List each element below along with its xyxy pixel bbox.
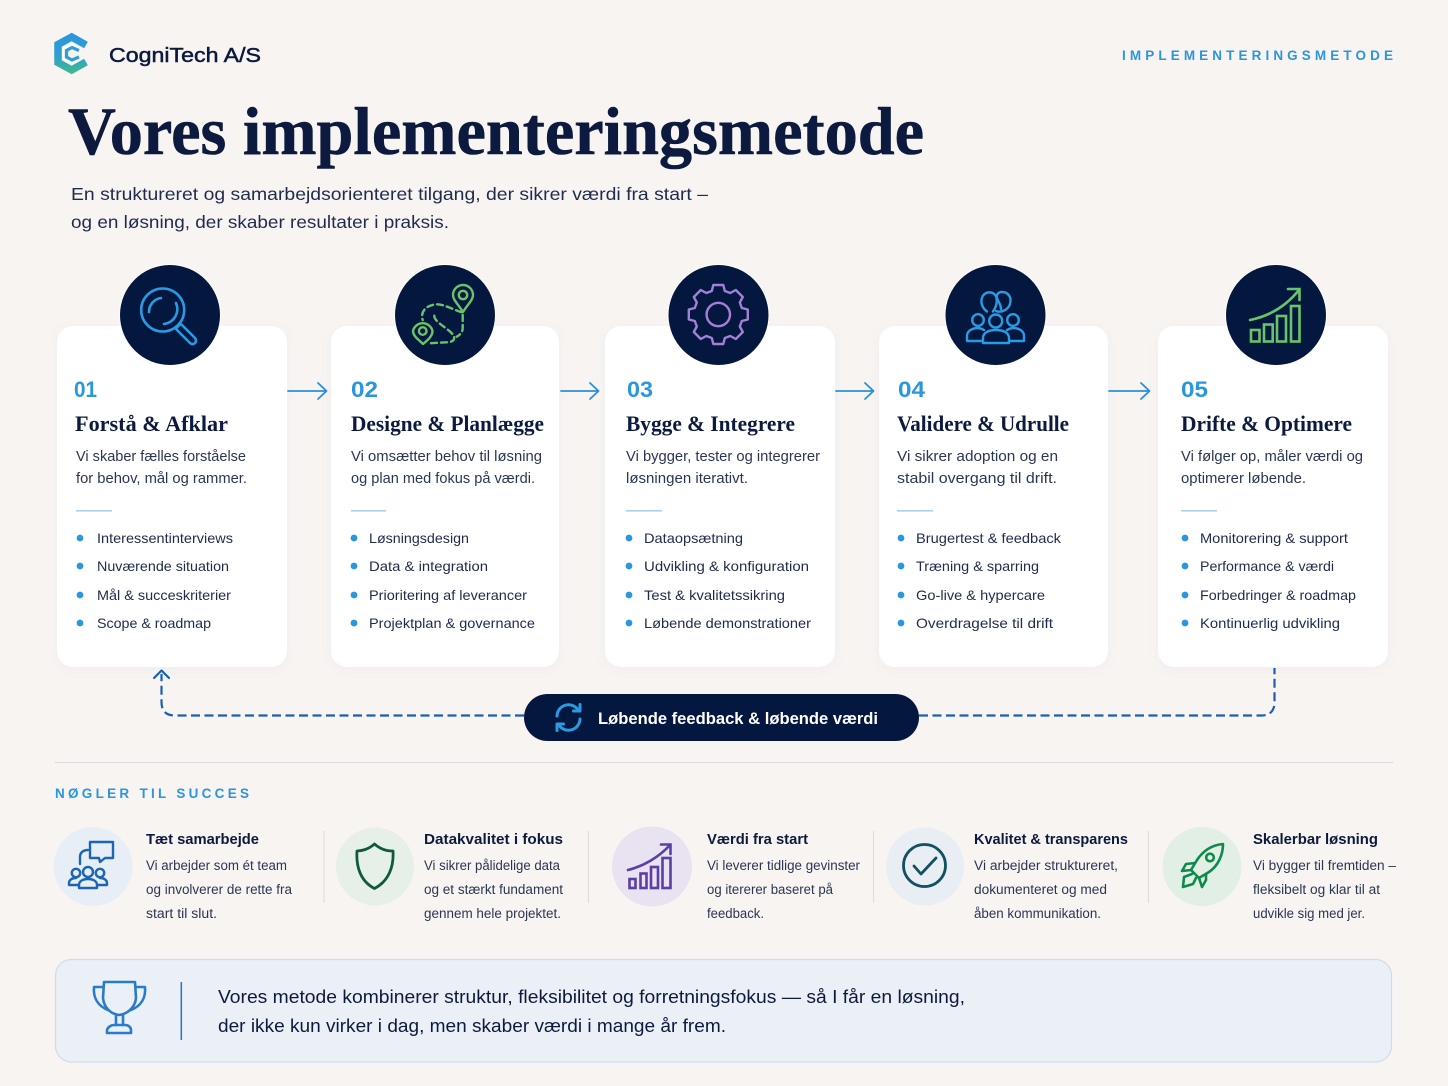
step list: Udvikling & konfiguration bbox=[644, 558, 809, 574]
key text: fleksibelt og klar til at bbox=[1253, 882, 1380, 897]
step card 01 bbox=[57, 326, 287, 667]
icon: team bbox=[944, 264, 1046, 366]
title: Vores implementeringsmetode bbox=[68, 93, 924, 169]
key text: Vi leverer tidlige gevinster bbox=[707, 858, 860, 873]
key text: og et stærkt fundament bbox=[424, 882, 563, 897]
step list bbox=[1182, 530, 1356, 631]
step heading: Forstå & Afklar bbox=[75, 411, 228, 436]
step list: Overdragelse til drift bbox=[916, 615, 1053, 631]
icon: growth chart bbox=[1225, 264, 1327, 366]
icon: check bbox=[886, 828, 964, 906]
conclusion text: Vores metode kombinerer struktur, fleksibilitet og forretningsfokus — så I får en løsning, bbox=[218, 987, 965, 1007]
key text: udvikle sig med jer. bbox=[1253, 906, 1365, 921]
step description: Vi omsætter behov til løsning bbox=[351, 449, 542, 465]
step number: 04 bbox=[898, 377, 926, 402]
key text: Vi sikrer pålidelige data bbox=[424, 858, 560, 873]
step heading: Designe & Planlægge bbox=[351, 411, 544, 436]
key: Værdi fra start bbox=[612, 826, 860, 921]
icon: trophy bbox=[94, 982, 145, 1033]
pill label: Løbende feedback & løbende værdi bbox=[598, 709, 878, 728]
key text: og itererer baseret på bbox=[707, 882, 833, 897]
key text: Vi bygger til fremtiden – bbox=[1253, 858, 1396, 873]
key title: Kvalitet & transparens bbox=[974, 831, 1128, 848]
step list bbox=[77, 530, 233, 631]
step list: Go-live & hypercare bbox=[916, 587, 1045, 603]
arrow: step 2 to 3 bbox=[561, 383, 598, 399]
key title: Tæt samarbejde bbox=[146, 831, 259, 848]
key text: og involverer de rette fra bbox=[146, 882, 292, 897]
key text: Vi arbejder struktureret, bbox=[974, 858, 1118, 873]
icon: shield bbox=[336, 828, 414, 906]
feedback pill bbox=[524, 694, 919, 741]
key title: Datakvalitet i fokus bbox=[424, 831, 563, 848]
key: Tæt samarbejde bbox=[54, 827, 292, 921]
logo: CogniTech bbox=[58, 37, 86, 70]
step list: Mål & succeskriterier bbox=[97, 587, 231, 603]
step number: 05 bbox=[1181, 377, 1208, 402]
conclusion text: der ikke kun virker i dag, men skaber værdi i mange år frem. bbox=[218, 1016, 726, 1036]
icon: refresh bbox=[557, 704, 580, 730]
key text: dokumenteret og med bbox=[974, 882, 1107, 897]
step list: Monitorering & support bbox=[1200, 530, 1348, 546]
step description: Vi bygger, tester og integrerer bbox=[626, 449, 820, 465]
arrow: step 4 to 5 bbox=[1109, 383, 1150, 399]
step description: og plan med fokus på værdi. bbox=[351, 471, 535, 487]
icon: gear bbox=[668, 264, 770, 366]
key text bbox=[424, 858, 563, 921]
conclusion text bbox=[218, 987, 965, 1036]
arrow: step 3 to 4 bbox=[836, 383, 874, 399]
step description: Vi skaber fælles forståelse bbox=[76, 449, 246, 465]
subtitle: En struktureret og samarbejdsorienteret tilgang, der sikrer værdi fra start – bbox=[71, 184, 708, 204]
step description: stabil overgang til drift. bbox=[897, 471, 1057, 487]
step list: Scope & roadmap bbox=[97, 615, 211, 631]
step heading: Validere & Udrulle bbox=[897, 411, 1069, 436]
step list bbox=[626, 530, 811, 631]
step card 03 bbox=[605, 326, 835, 667]
step list: Løbende demonstrationer bbox=[644, 615, 811, 631]
icon: rocket bbox=[1162, 827, 1242, 906]
step list: Prioritering af leverancer bbox=[369, 587, 527, 603]
step list: Kontinuerlig udvikling bbox=[1200, 615, 1340, 631]
step list: Performance & værdi bbox=[1200, 558, 1334, 574]
key text: gennem hele projektet. bbox=[424, 906, 561, 921]
key text: åben kommunikation. bbox=[974, 906, 1101, 921]
step list: Projektplan & governance bbox=[369, 615, 535, 631]
brand name: CogniTech A/S bbox=[109, 44, 261, 67]
key: Datakvalitet i fokus bbox=[336, 828, 563, 921]
header label: IMPLEMENTERINGSMETODE bbox=[1122, 48, 1393, 63]
step card 05 bbox=[1158, 326, 1388, 667]
key text: feedback. bbox=[707, 906, 764, 921]
step description: Vi følger op, måler værdi og bbox=[1181, 449, 1363, 465]
section heading: NØGLER TIL SUCCES bbox=[55, 786, 249, 801]
step list: Brugertest & feedback bbox=[916, 530, 1062, 546]
key text bbox=[974, 858, 1118, 921]
key: Skalerbar løsning bbox=[1162, 827, 1396, 921]
key text bbox=[707, 858, 860, 921]
step description bbox=[626, 449, 820, 487]
step number: 01 bbox=[74, 377, 97, 402]
icon: magnifier bbox=[119, 264, 221, 366]
key text: start til slut. bbox=[146, 906, 217, 921]
step list: Dataopsætning bbox=[644, 530, 743, 546]
icon: value chart bbox=[612, 826, 692, 906]
step description bbox=[351, 449, 542, 487]
step card 04 bbox=[879, 326, 1108, 667]
step heading: Bygge & Integrere bbox=[626, 411, 795, 436]
step card 02 bbox=[331, 326, 559, 667]
step number: 02 bbox=[351, 377, 378, 402]
key text bbox=[146, 858, 292, 921]
step heading: Drifte & Optimere bbox=[1181, 411, 1352, 436]
icon: collaboration bbox=[54, 827, 132, 906]
step description: for behov, mål og rammer. bbox=[76, 471, 247, 487]
step list: Data & integration bbox=[369, 558, 488, 574]
key text: Vi arbejder som ét team bbox=[146, 858, 287, 873]
step list: Træning & sparring bbox=[916, 558, 1039, 574]
key title: Værdi fra start bbox=[707, 831, 808, 848]
step list bbox=[351, 530, 535, 631]
conclusion panel bbox=[56, 960, 1392, 1062]
key title: Skalerbar løsning bbox=[1253, 831, 1378, 848]
step list bbox=[898, 530, 1062, 631]
subtitle: og en løsning, der skaber resultater i praksis. bbox=[71, 212, 449, 232]
subtitle bbox=[71, 184, 708, 232]
step list: Løsningsdesign bbox=[369, 530, 469, 546]
step description: optimerer løbende. bbox=[1181, 471, 1306, 487]
step list: Interessentinterviews bbox=[97, 530, 233, 546]
step description bbox=[897, 449, 1058, 487]
step list: Forbedringer & roadmap bbox=[1200, 587, 1356, 603]
key text bbox=[1253, 858, 1396, 921]
step list: Nuværende situation bbox=[97, 558, 229, 574]
step list: Test & kvalitetssikring bbox=[644, 587, 785, 603]
step description bbox=[76, 449, 247, 487]
key: Kvalitet & transparens bbox=[886, 828, 1128, 921]
feedback loop: dashed return line bbox=[154, 668, 1274, 716]
icon: route map bbox=[394, 264, 496, 366]
arrow: step 1 to 2 bbox=[288, 383, 326, 399]
step number: 03 bbox=[627, 377, 653, 402]
step description: Vi sikrer adoption og en bbox=[897, 449, 1058, 465]
step description: løsningen iterativt. bbox=[626, 471, 748, 487]
step description bbox=[1181, 449, 1363, 487]
